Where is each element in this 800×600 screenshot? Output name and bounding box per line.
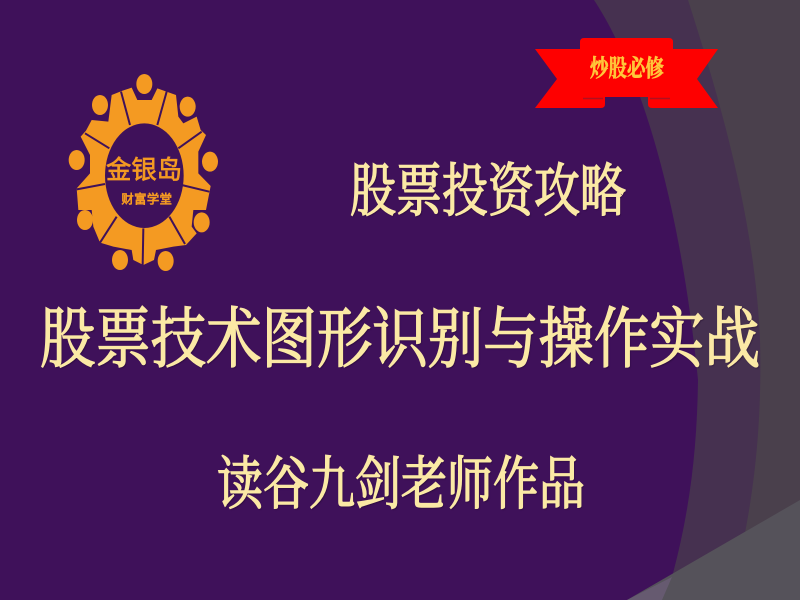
ribbon badge [535,38,718,108]
heading: 股票投资攻略: 股票投资攻略 [350,159,626,223]
logo ring [77,88,211,265]
logo text: 财富学堂 [121,189,172,207]
logo text: 金银岛 [106,150,182,186]
logo: 金银岛财富学堂 gear [68,74,218,271]
logo text [106,150,182,207]
main title: 股票技术图形识别与操作实战 [40,303,760,376]
logo heads [69,74,218,271]
author line: 读谷九剑老师作品 [217,452,585,516]
ribbon badge: 炒股必修 [589,55,664,82]
